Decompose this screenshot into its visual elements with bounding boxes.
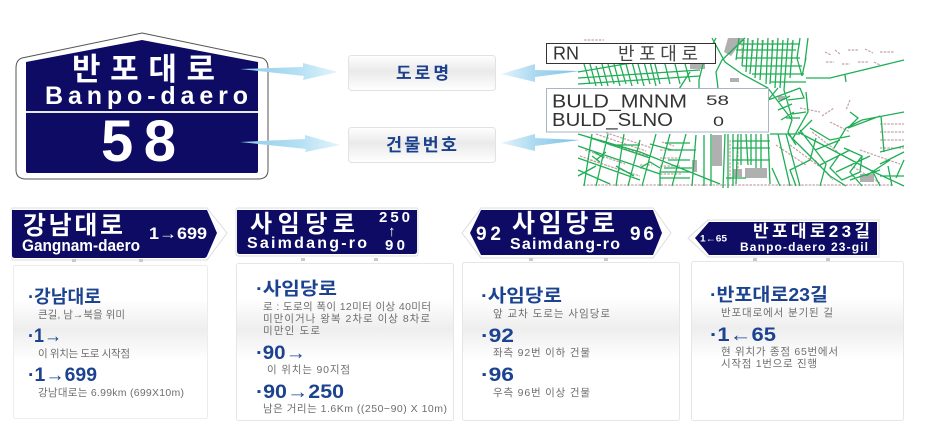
- panel: Saimdang-ro explanation: 남은 거리는 1.6Km ((250−90) X 10m): [263, 403, 447, 415]
- panel: Gangnam-daero explanation: [14, 266, 208, 418]
- panel: Saimdang-ro explanation: 미만이거나 왕복 2차로 이상 8차로: [263, 313, 430, 325]
- panel: Banpo-daero 23-gil explanation: [692, 262, 904, 420]
- panel: Gangnam-daero explanation: ·1→: [28, 326, 62, 347]
- road sign: Saimdang-ro 92 / 96: Saimdang-ro: [510, 236, 620, 253]
- panel: Saimdang-ro 92/96 explanation: 우측 96번 이상 건물: [493, 387, 590, 399]
- road sign: Saimdang-ro 90 to 250: Saimdang-ro: [247, 235, 367, 252]
- map attribute box: building numbers: BULD_MNNM: [552, 90, 687, 112]
- panel: Saimdang-ro 92/96 explanation: ·92: [481, 326, 514, 347]
- panel: Gangnam-daero explanation: ·1→699: [28, 365, 97, 386]
- panel: Banpo-daero 23-gil explanation: 반포대로에서 분기된 길: [721, 306, 833, 319]
- sign text: building number: 58: [101, 109, 176, 174]
- panel: Saimdang-ro 92/96 explanation: 좌측 92번 이하 건물: [493, 346, 590, 359]
- map attribute box: building numbers: BULD_SLNO: [552, 109, 673, 131]
- road sign: Saimdang-ro 90 to 250: 90: [385, 237, 405, 254]
- map attribute box: road name: RN: [553, 42, 579, 64]
- road sign: Saimdang-ro 92 / 96: 사임당로: [512, 210, 615, 238]
- road sign: Banpo-daero 23-gil: [688, 220, 879, 257]
- arrow: map attribute to road name label: [501, 64, 580, 82]
- map attribute box: road name: 반포대로: [618, 44, 698, 64]
- panel: Saimdang-ro explanation: 이 위치는 90지점: [267, 363, 350, 376]
- label: building number: [348, 128, 496, 162]
- map attribute box: building numbers: 0: [713, 113, 724, 129]
- sign text: Korean road name: 반포대로: [72, 52, 215, 87]
- main road sign: Banpo-daero 58: [16, 33, 268, 179]
- label: road name: [348, 56, 496, 90]
- map attribute box: road name: [546, 42, 716, 64]
- panel: Saimdang-ro explanation: 미만인 도로: [263, 325, 320, 337]
- label: building number: 건물번호: [386, 135, 457, 155]
- road sign: Gangnam-daero: Gangnam-daero: [22, 236, 140, 255]
- panel: Saimdang-ro explanation: ·사임당로: [256, 279, 337, 299]
- panel: Banpo-daero 23-gil explanation: 시작점 1번으로 진행: [721, 358, 817, 370]
- road sign: Saimdang-ro 90 to 250: 사임당로: [250, 211, 355, 238]
- map: road network: [546, 38, 904, 188]
- road sign: Gangnam-daero: 강남대로: [23, 212, 123, 240]
- panel: Saimdang-ro 92/96 explanation: ·96: [481, 365, 514, 386]
- panel: Gangnam-daero explanation: ·강남대로: [28, 287, 101, 307]
- label: road name: 도로명: [396, 64, 449, 83]
- road sign: Gangnam-daero: [12, 208, 227, 260]
- arrow: map attribute to building number label: [501, 134, 580, 151]
- arrow: road name to label: [240, 63, 338, 80]
- panel: Saimdang-ro 92/96 explanation: 앞 교차 도로는 사임당로: [493, 307, 610, 320]
- panel: Saimdang-ro explanation: ·90→: [256, 343, 306, 364]
- arrow: building number to label: [240, 135, 340, 152]
- panel: Banpo-daero 23-gil explanation: ·반포대로23길: [710, 285, 828, 305]
- road sign: Saimdang-ro 90 to 250: ↑: [388, 223, 396, 240]
- panel: Saimdang-ro explanation: [236, 264, 454, 420]
- panel: Gangnam-daero explanation: 이 위치는 도로 시작점: [38, 347, 130, 360]
- panel: Saimdang-ro 92/96 explanation: [462, 262, 680, 420]
- sign text: romanized road name: Banpo-daero: [45, 82, 248, 110]
- panel: Gangnam-daero explanation: 큰길, 남→북을 위미: [38, 308, 125, 321]
- panel: Saimdang-ro 92/96 explanation: ·사임당로: [481, 286, 562, 306]
- road sign: Saimdang-ro 90 to 250: 250: [379, 209, 410, 226]
- road sign: Saimdang-ro 90 to 250: [236, 208, 418, 256]
- panel: Banpo-daero 23-gil explanation: ·1←65: [710, 325, 776, 346]
- panel: Banpo-daero 23-gil explanation: 현 위치가 종점 65번에서: [721, 345, 838, 358]
- panel: Gangnam-daero explanation: 강남대로는 6.99km (699X10m): [38, 387, 184, 399]
- road sign: Saimdang-ro 92 / 96: [462, 208, 671, 258]
- panel: Saimdang-ro explanation: ·90→250: [256, 382, 344, 403]
- road sign: Saimdang-ro 92 / 96: 92: [476, 224, 501, 245]
- road sign: Banpo-daero 23-gil: Banpo-daero 23-gil: [740, 240, 868, 254]
- road sign: Banpo-daero 23-gil: 반포대로23길: [753, 222, 870, 241]
- road sign: Gangnam-daero: 1→699: [149, 224, 207, 243]
- map attribute box: building numbers: [546, 88, 768, 132]
- road sign: Saimdang-ro 92 / 96: 96: [630, 224, 654, 245]
- road sign: Banpo-daero 23-gil: 1←65: [700, 234, 727, 244]
- panel: Saimdang-ro explanation: 로 : 도로의 폭이 12미터 이상 40미터: [263, 301, 431, 313]
- map attribute box: building numbers: 58: [706, 92, 729, 108]
